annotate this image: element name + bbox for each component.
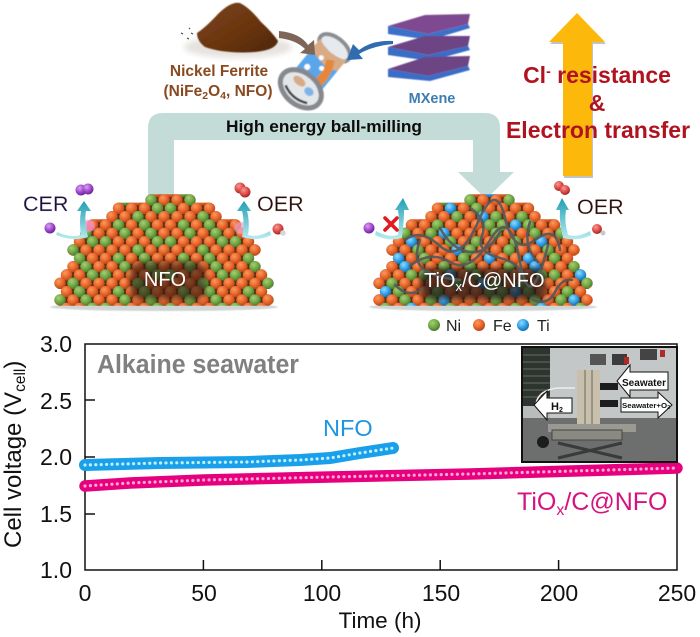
label: MXene: MXene	[409, 91, 455, 107]
label: nickel ferrite: 2	[202, 90, 208, 102]
carbon network strands	[395, 200, 572, 302]
panel: TiOx/C@NFO particle	[369, 190, 599, 311]
label: nickel ferrite: (NiFe	[164, 83, 202, 100]
label: nickel ferrite	[164, 63, 272, 102]
panel: CER reaction on NFO	[23, 184, 95, 239]
arrow: seawater and oxygen out: Seawater+O	[622, 401, 665, 410]
text: Cl- resistance and electron transfer: -	[546, 63, 551, 79]
panel: NFO particle	[50, 190, 280, 311]
label: TiOx/C@NFO: /C@NFO	[462, 270, 545, 292]
y tick labels: 2.5	[40, 388, 72, 414]
label: NFO: NFO	[144, 269, 186, 291]
icon: ball-mill canister	[273, 26, 359, 116]
y axis title: Cell voltage (V	[0, 392, 27, 548]
y tick labels: 1.0	[40, 557, 72, 583]
label: nickel ferrite: O	[208, 83, 220, 100]
text: Cl- resistance and electron transfer: Electron transfer	[506, 117, 690, 143]
y tick labels	[40, 331, 72, 583]
label: TiOx/C@NFO series: /C@NFO	[564, 488, 668, 516]
arrow: mxene into mill	[347, 41, 393, 60]
label: OER: OER	[257, 192, 304, 216]
icon: nickel ferrite powder	[181, 3, 292, 58]
arrow: ball-milling process	[148, 113, 514, 199]
label: TiOx/C@NFO series: x	[556, 502, 564, 519]
arrow: seawater and oxygen out	[621, 392, 672, 418]
legend: atoms: Ni	[446, 318, 461, 335]
y tick labels: 1.5	[40, 501, 72, 527]
axes	[85, 344, 677, 570]
text: Cl- resistance and electron transfer	[506, 62, 690, 143]
arrow: seawater in	[617, 365, 668, 397]
y tick labels: 3.0	[40, 331, 72, 357]
inset: electrolyzer photo	[522, 347, 677, 462]
label: TiOx/C@NFO: x	[455, 279, 462, 294]
y axis title: cell	[12, 369, 29, 392]
icon: red X	[385, 218, 397, 230]
x axis title: Time (h)	[339, 608, 421, 633]
series: TiOx/C@NFO	[85, 468, 677, 486]
y tick labels: 2.0	[40, 444, 72, 470]
text: Cl- resistance and electron transfer: &	[589, 90, 605, 116]
x tick labels: 150	[422, 580, 460, 606]
legend: atoms: Fe	[493, 318, 512, 335]
cell stack	[577, 370, 600, 426]
y axis title: )	[0, 361, 27, 369]
x tick labels: 250	[658, 580, 696, 606]
x tick labels: 200	[540, 580, 578, 606]
label: nickel ferrite: 4	[220, 90, 226, 102]
arrow: H2 out: 2	[559, 407, 563, 414]
x tick labels	[79, 580, 696, 606]
panel: blocked CER reaction	[364, 198, 409, 239]
arrow: seawater and oxygen out: 2	[667, 405, 670, 411]
legend: atoms: Ti	[537, 318, 550, 335]
x tick labels: 0	[79, 580, 91, 606]
label: CER: CER	[23, 192, 68, 216]
text: Cl- resistance and electron transfer: resistance	[551, 62, 671, 88]
x tick labels: 50	[191, 580, 217, 606]
panel: OER reaction on NFO	[234, 182, 304, 239]
label: OER: OER	[577, 195, 624, 219]
x tick labels: 100	[303, 580, 341, 606]
line chart: cell voltage vs time	[0, 331, 696, 633]
series: NFO	[85, 448, 393, 465]
arrow: seawater in: Seawater	[622, 377, 666, 389]
label: NFO series: NFO	[323, 415, 373, 441]
label: nickel ferrite: Nickel Ferrite	[170, 63, 268, 80]
label: nickel ferrite: , NFO)	[226, 83, 272, 100]
label: TiOx/C@NFO series: TiO	[517, 488, 556, 516]
arrow: H2 out	[534, 391, 572, 420]
heading: high energy ball-milling: High energy ball-milling	[226, 117, 422, 136]
arrow: H2 out: H	[551, 401, 559, 413]
label: alkaline seawater: Alkaine seawater	[97, 351, 299, 379]
arrow: powder into mill	[279, 31, 315, 55]
panel: OER reaction on TiOx/C@NFO	[554, 181, 624, 239]
text: Cl- resistance and electron transfer: Cl	[523, 62, 546, 88]
icon: mxene layers	[388, 14, 470, 81]
label: TiOx/C@NFO: TiO	[424, 270, 455, 292]
legend: atoms	[428, 318, 550, 335]
arrow: performance improvement	[549, 13, 606, 178]
